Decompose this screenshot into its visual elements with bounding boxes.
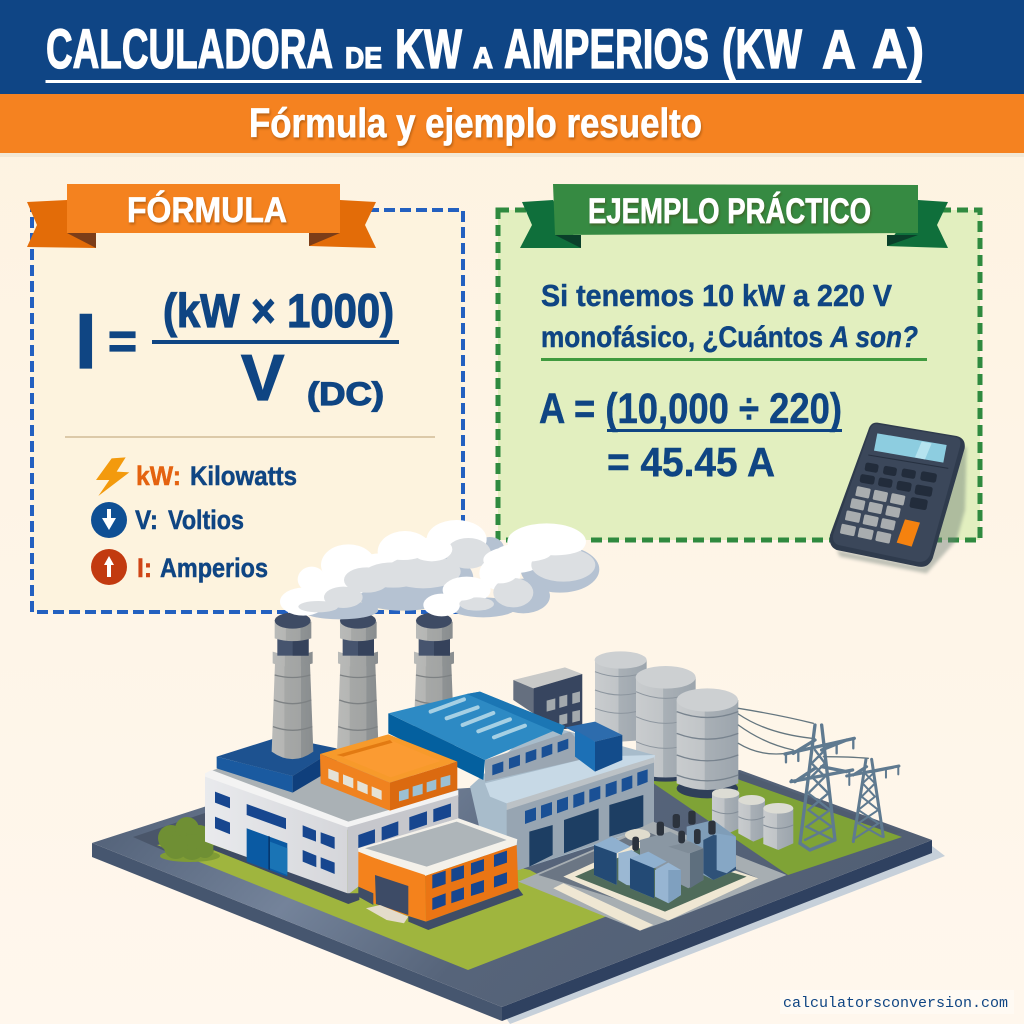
formula [75, 284, 399, 414]
illustration: power plant [92, 613, 945, 1024]
calculation [539, 385, 842, 485]
panel: worked example [498, 210, 980, 540]
bush [158, 817, 220, 862]
legend: kW [96, 457, 297, 496]
legend: V [91, 502, 244, 538]
calculation: A = (10,000 ÷ 220) [539, 385, 842, 433]
ribbon label: FÓRMULA [127, 190, 287, 230]
title: CALCULADORA [46, 17, 333, 80]
website credit: calculatorsconversion.com [783, 995, 1008, 1012]
legend: I: I: [137, 553, 152, 583]
website credit [780, 990, 1014, 1014]
title: A [822, 18, 856, 80]
formula: (DC) [307, 376, 384, 412]
legend: V: V: [135, 505, 158, 535]
title [46, 17, 924, 82]
question: monofásico, ¿Cuántos A son? [541, 321, 918, 354]
formula: (kW × 1000) [163, 284, 394, 337]
smoke clouds [280, 520, 599, 619]
chimneys rear [337, 613, 455, 759]
subtitle band [0, 94, 1024, 157]
legend: I: Amperios [160, 553, 268, 583]
title: A) [872, 17, 924, 80]
ribbon label: EJEMPLO PRÁCTICO [588, 191, 871, 231]
icon: calculator [830, 423, 967, 573]
door [247, 828, 287, 877]
title: DE [345, 42, 382, 75]
subtitle: Fórmula y ejemplo resuelto [249, 100, 702, 146]
ribbon: formula [27, 184, 376, 248]
question [541, 278, 918, 354]
legend: I [91, 549, 268, 585]
ribbon: example [520, 184, 948, 248]
header: title band [0, 0, 1024, 95]
title: A [473, 42, 493, 75]
formula: V [241, 341, 284, 414]
panel: formula [32, 210, 463, 612]
substation [518, 811, 787, 931]
storage tanks [595, 651, 793, 850]
smoke: right stack [423, 523, 599, 617]
transmission towers [738, 708, 899, 850]
orange rooftop block [320, 734, 457, 811]
small rooftop block [513, 667, 582, 733]
title: AMPERIOS [504, 17, 709, 80]
platform [92, 770, 945, 1024]
legend: V: Voltios [168, 505, 244, 535]
legend: kW: Kilowatts [190, 461, 297, 491]
calculation: = 45.45 A [607, 439, 775, 485]
title: (KW [722, 17, 802, 80]
legend: kW: kW: [136, 461, 181, 491]
rear building [388, 692, 655, 870]
question: Si tenemos 10 kW a 220 V [541, 278, 892, 313]
chimney front [212, 613, 458, 823]
formula: I [75, 297, 97, 385]
main building [205, 770, 458, 904]
lawn [157, 745, 902, 970]
title: KW [395, 17, 462, 80]
formula: = [108, 313, 137, 369]
smoke: left stacks [280, 520, 504, 619]
orange annex [358, 818, 523, 930]
